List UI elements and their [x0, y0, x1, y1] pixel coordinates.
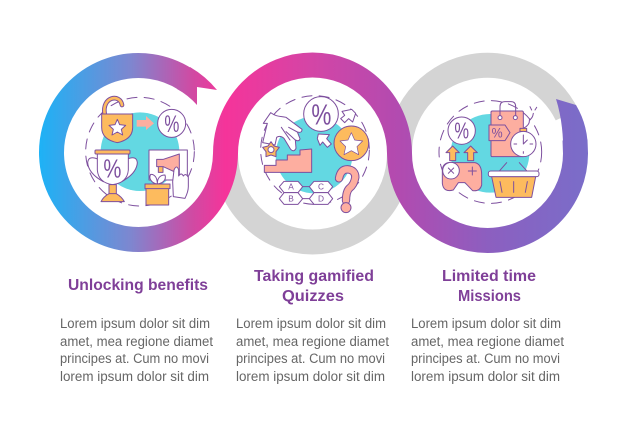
dashed ring — [439, 101, 542, 203]
column 2: body text: lorem ipsum dolor sit dim — [236, 369, 385, 384]
up arrows — [446, 146, 477, 161]
column 2: body text — [236, 316, 389, 384]
column 3: body text: principes at. Cum no movi — [411, 351, 560, 366]
poster — [149, 150, 187, 180]
answer hexagons: B — [288, 194, 294, 204]
basket handles — [497, 163, 529, 173]
hand — [263, 113, 302, 151]
gradient ribbon linking the three circles — [52, 65, 587, 241]
arrow — [137, 116, 154, 130]
star — [340, 133, 363, 155]
percent sign: % — [454, 118, 469, 144]
ribbon arrow head — [177, 67, 217, 105]
trophy handles — [88, 158, 137, 182]
column 1: body text: Lorem ipsum dolor sit dim — [60, 316, 210, 331]
lock shackle — [104, 98, 122, 114]
basket ribs — [500, 182, 527, 192]
megaphone handle — [158, 165, 163, 172]
column 1: body text — [60, 316, 213, 384]
basket body — [492, 177, 536, 197]
arrow to percent — [341, 109, 356, 123]
percent badge — [304, 97, 338, 131]
icon: limited time missions — [439, 101, 542, 203]
stopwatch hands — [514, 135, 533, 153]
trophy base — [101, 194, 124, 202]
trophy cup — [97, 154, 128, 185]
star — [109, 119, 126, 135]
controller button — [443, 162, 459, 179]
question dot — [341, 203, 351, 213]
column 2: body text: amet, mea regione diamet — [236, 334, 389, 349]
stopwatch — [511, 131, 536, 157]
price tag — [489, 125, 510, 141]
icon backdrop — [276, 117, 352, 193]
gift lid — [145, 184, 170, 189]
pointing hand — [173, 167, 188, 198]
column 3: body text — [411, 316, 564, 384]
percent sign: % — [311, 99, 331, 131]
column 1: body text: amet, mea regione diamet — [60, 334, 213, 349]
gift box — [146, 188, 169, 205]
column 3: body text: lorem ipsum dolor sit dim — [411, 369, 560, 384]
small star — [263, 142, 279, 157]
column 2: heading: Taking gamified — [254, 268, 374, 285]
question mark fill — [339, 169, 355, 201]
column 2: body text: principes at. Cum no movi — [236, 351, 385, 366]
percent badge — [448, 117, 475, 144]
answer hexagons: A — [288, 182, 294, 192]
percent sign: % — [164, 111, 179, 138]
controller marks — [448, 167, 476, 175]
column 1: body text: principes at. Cum no movi — [60, 351, 209, 366]
trophy stem — [109, 185, 116, 194]
dashed ring — [261, 96, 369, 204]
column 2: body text: Lorem ipsum dolor sit dim — [236, 316, 386, 331]
star badge — [334, 126, 369, 161]
arrow to badge — [317, 134, 331, 147]
stairs — [264, 149, 312, 172]
bag handle front — [500, 111, 516, 118]
dashed ring — [86, 97, 194, 206]
answer hexagons: D — [318, 194, 324, 204]
column 3: heading: Limited time — [442, 268, 536, 285]
icon backdrop — [451, 114, 529, 193]
trophy rim — [95, 150, 130, 154]
column 1: body text: lorem ipsum dolor sit dim — [60, 369, 209, 384]
answer hexagons: C — [318, 182, 324, 192]
bag eyelets — [498, 116, 517, 120]
question mark outline — [339, 169, 355, 201]
icon: unlocking benefits — [86, 97, 194, 206]
bag handle — [500, 102, 516, 118]
column 3: heading — [442, 268, 536, 305]
bag — [491, 111, 523, 157]
column 3: body text: Lorem ipsum dolor sit dim — [411, 316, 561, 331]
column 3: body text: amet, mea regione diamet — [411, 334, 564, 349]
gift leaves — [150, 174, 165, 184]
star hole — [268, 147, 274, 153]
trophy percent: % — [103, 154, 121, 184]
column 3: heading: Missions — [458, 288, 521, 305]
icon backdrop — [101, 112, 179, 191]
answer hexagons — [279, 181, 333, 204]
percent badge — [158, 109, 186, 137]
column 2: heading: Quizzes — [282, 288, 344, 305]
game controller — [442, 163, 482, 191]
lock shackle fill — [104, 98, 122, 114]
lock body — [102, 114, 133, 143]
stopwatch fuse — [523, 107, 537, 128]
stopwatch crown — [520, 128, 527, 132]
finger lines — [281, 127, 297, 140]
megaphone — [157, 154, 179, 174]
basket rim — [488, 171, 539, 177]
tag percent: % — [492, 125, 503, 141]
column 1: heading: Unlocking benefits — [68, 277, 208, 294]
column 2: heading — [254, 268, 374, 305]
ribbon tail — [556, 99, 588, 141]
icon: gamified quizzes — [261, 96, 369, 213]
grey ribbon behind circles — [226, 65, 567, 242]
